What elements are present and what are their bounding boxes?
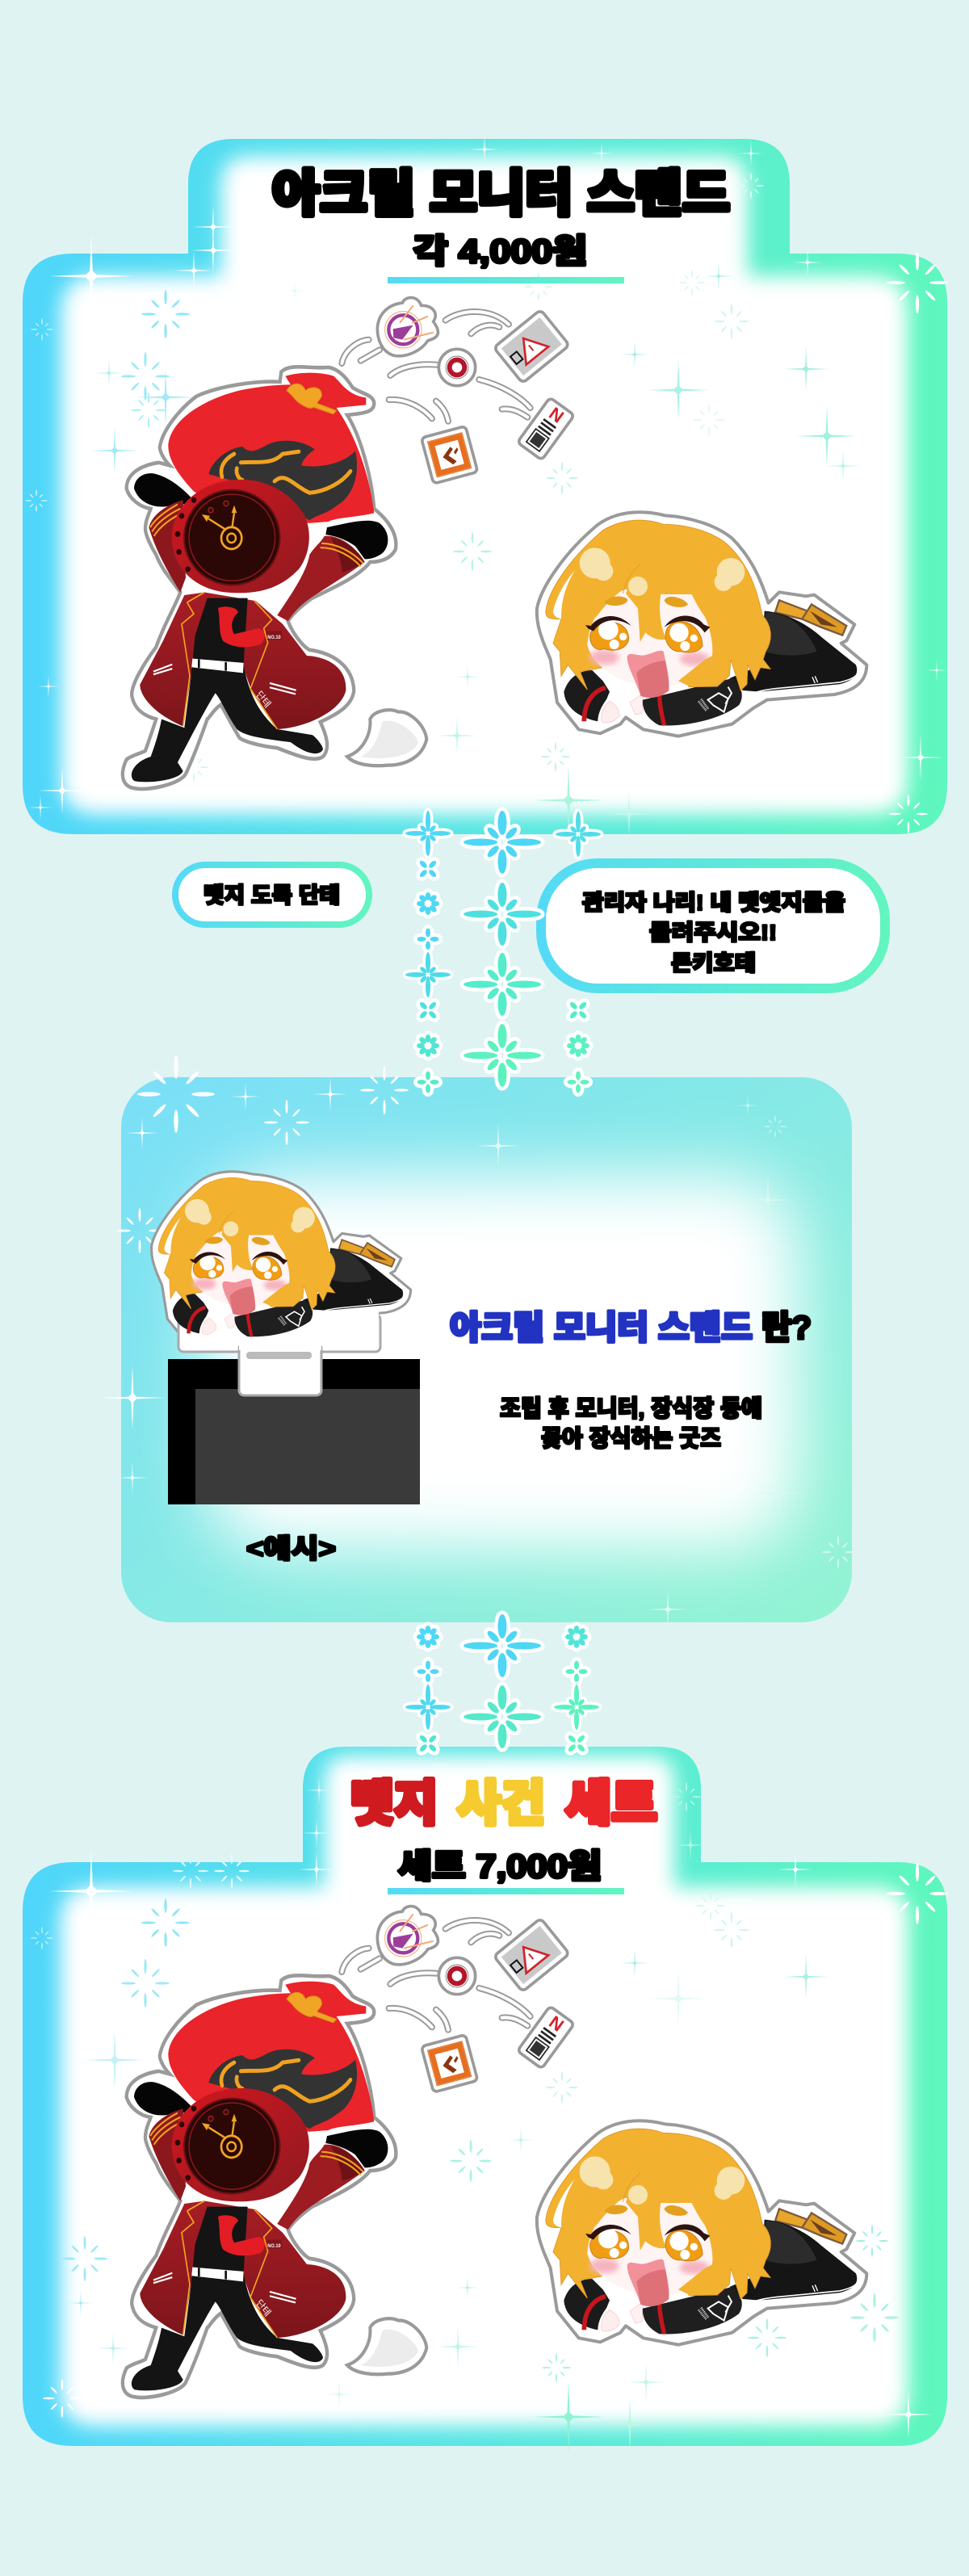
speech pill: 돈키호테: 돈키호테 — [671, 951, 756, 975]
acrylic outline — [152, 1172, 411, 1345]
monitor — [168, 1359, 420, 1504]
acrylic base joint — [180, 1308, 379, 1332]
sticker: dust cloud — [347, 710, 426, 766]
sparkles: panel decorations — [25, 135, 948, 837]
heading: 아크릴 모니터 스탠드 란?: 란? — [761, 1309, 812, 1346]
speech pill: 돈키호테: 관리자 나리! 내 뱃엣지들을 — [582, 891, 845, 915]
title: 뱃지 사건 세트 — [350, 1777, 657, 1831]
snowflake chain: upper — [405, 811, 601, 1093]
sparkles: bottom panel — [31, 1777, 948, 2452]
label pill: 뱃지 도둑 단테: 뱃지 도둑 단테 — [203, 883, 340, 908]
title: 뱃지 사건 세트: 뱃지 — [350, 1777, 438, 1831]
sticker: prone girl — [537, 512, 866, 736]
price: 각 4,000원: 각 4,000원 — [413, 233, 587, 270]
sticker: thief character — [123, 367, 396, 789]
speech pill: 돈키호테 — [541, 863, 885, 988]
sticker: thief badges — [342, 1907, 574, 2092]
sticker: dust cloud — [347, 2318, 426, 2374]
panel: acrylic monitor stand — [23, 135, 948, 837]
example: monitor with acrylic stand — [152, 1172, 420, 1504]
label pill: 뱃지 도둑 단테 — [175, 865, 369, 925]
sticker: thief badges — [342, 298, 574, 484]
sparkles: mid panel — [100, 1055, 854, 1629]
clip tab — [239, 1340, 321, 1395]
snowflake chain: lower — [405, 1614, 599, 1759]
heading: 아크릴 모니터 스탠드 란?: 아크릴 모니터 스탠드 — [450, 1309, 753, 1346]
acrylic base — [178, 1315, 380, 1352]
panel: what is a monitor stand — [100, 1055, 854, 1629]
description text — [500, 1395, 762, 1452]
speech pill: 돈키호테: 돌려주시오!! — [649, 921, 777, 945]
sticker: prone girl — [537, 2121, 866, 2345]
title: 뱃지 사건 세트: 사건 — [457, 1777, 545, 1831]
caption: 예시: <예시> — [246, 1533, 336, 1563]
underline bar — [388, 277, 624, 283]
underline bar — [388, 1888, 624, 1894]
description text: 꽂아 장식하는 굿즈 — [541, 1425, 721, 1452]
price: 세트 7,000원: 세트 7,000원 — [398, 1848, 602, 1885]
description text: 조립 후 모니터, 장식장 등에 — [500, 1395, 762, 1422]
title: 아크릴 모니터 스탠드: 아크릴 모니터 스탠드 — [272, 166, 730, 222]
sticker: thief character — [123, 1975, 396, 2398]
panel: badge incident set — [23, 1747, 948, 2452]
acrylic girl — [158, 1177, 404, 1336]
title: 뱃지 사건 세트: 세트 — [565, 1777, 657, 1831]
